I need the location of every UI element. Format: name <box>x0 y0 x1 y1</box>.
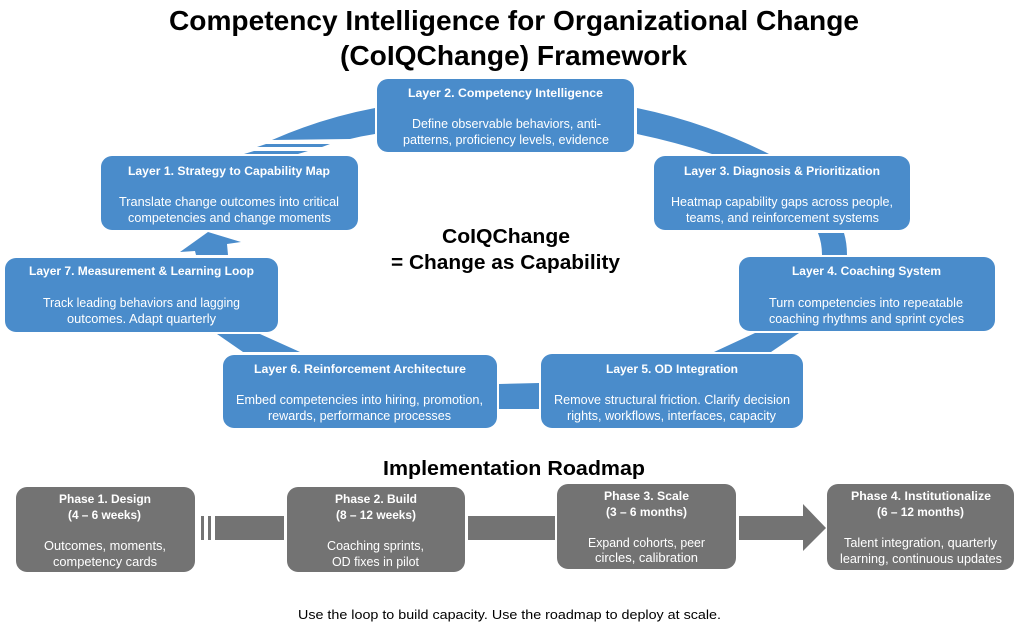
phase 4 text <box>840 491 1002 566</box>
layer 3 text: Heatmap capability gaps across people, <box>671 195 893 209</box>
phase 4 box <box>827 484 1014 570</box>
phase 2 text <box>327 494 424 569</box>
layer 6 text: Embed competencies into hiring, promotion, <box>236 393 483 407</box>
arrow: layer 3 to layer 4 <box>818 233 847 255</box>
layer 3 text: Layer 3. Diagnosis & Prioritization <box>684 166 880 178</box>
phase 2 text: Phase 2. Build <box>335 494 417 506</box>
phase 4 text: Phase 4. Institutionalize <box>851 491 991 503</box>
layer 7 text: Layer 7. Measurement & Learning Loop <box>29 266 254 278</box>
layer 2 box <box>377 79 634 152</box>
arrow: layer 2 to layer 3 <box>637 108 769 154</box>
panel: layer 3 <box>654 156 910 230</box>
panel: phase 2 <box>287 487 465 572</box>
phase 3 text <box>588 491 705 565</box>
arrow: layer 5 to layer 6 <box>499 383 539 409</box>
layer 3 text <box>671 166 893 225</box>
layer 5 box <box>541 354 803 428</box>
layer 7 text: outcomes. Adapt quarterly <box>67 312 217 326</box>
center label: = Change as Capability <box>391 252 621 274</box>
arrow: phase 1 to phase 2 <box>201 516 284 540</box>
layer 2 text: Define observable behaviors, anti- <box>412 117 601 131</box>
phase 2 box <box>287 487 465 572</box>
layer 5 text: Remove structural friction. Clarify decision <box>554 393 790 407</box>
phase 3 text: Phase 3. Scale <box>604 491 689 503</box>
arrow: phase 2 to phase 3 <box>468 516 555 540</box>
layer 2 text <box>403 88 609 147</box>
layer 4 text <box>769 266 964 326</box>
layer 7 box <box>5 258 278 332</box>
panel: layer 1 <box>101 156 358 230</box>
panel: layer 5 <box>541 354 803 428</box>
layer 7 text <box>29 266 254 326</box>
phase 1 box <box>16 487 195 572</box>
phase 1 text <box>44 494 166 569</box>
layer 2 text: patterns, proficiency levels, evidence <box>403 133 609 147</box>
center label: CoIQChange <box>442 226 570 248</box>
layer 6 text: rewards, performance processes <box>268 409 451 423</box>
phase 4 text: learning, continuous updates <box>840 552 1002 566</box>
phase 4 text: Talent integration, quarterly <box>844 536 998 550</box>
phase 3 text: Expand cohorts, peer <box>588 536 705 550</box>
footer note: Use the loop to build capacity. Use the roadmap to deploy at scale. <box>298 607 721 622</box>
layer 1 text: Translate change outcomes into critical <box>119 195 339 209</box>
layer 6 text <box>236 364 483 423</box>
arrow: layer 1 to layer 2 <box>244 108 375 154</box>
panel: phase 4 <box>827 484 1014 570</box>
layer 4 text: Layer 4. Coaching System <box>792 266 941 278</box>
title: (CoIQChange) Framework <box>340 40 687 71</box>
center label <box>391 226 621 274</box>
phase 1 text: (4 – 6 weeks) <box>68 510 141 522</box>
layer 4 text: Turn competencies into repeatable <box>769 296 963 310</box>
panel: layer 2 <box>377 79 634 152</box>
heading: implementation roadmap: Implementation Roadmap <box>383 458 645 480</box>
phase 2 text: Coaching sprints, <box>327 539 424 553</box>
layer 1 text <box>119 166 339 225</box>
phase 2 text: (8 – 12 weeks) <box>336 510 416 522</box>
panel: phase 1 <box>16 487 195 572</box>
panel: phase 3 <box>557 484 736 569</box>
layer 3 text: teams, and reinforcement systems <box>686 211 879 225</box>
phase 3 box <box>557 484 736 569</box>
arrow: layer 7 to layer 1 <box>180 232 241 255</box>
layer 4 text: coaching rhythms and sprint cycles <box>769 312 964 326</box>
arrow: layer 6 to layer 7 <box>217 334 300 352</box>
layer 2 text: Layer 2. Competency Intelligence <box>408 88 603 100</box>
phase 1 text: Phase 1. Design <box>59 494 151 506</box>
layer 1 box <box>101 156 358 230</box>
layer 5 text: Layer 5. OD Integration <box>606 364 738 376</box>
title <box>169 5 859 71</box>
phase 3 text: circles, calibration <box>595 551 698 565</box>
layer 4 box <box>739 257 995 331</box>
arrow: phase 3 to phase 4 <box>739 504 826 551</box>
layer 7 text: Track leading behaviors and lagging <box>43 296 240 310</box>
phase 4 text: (6 – 12 months) <box>877 507 964 519</box>
panel: layer 4 <box>739 257 995 331</box>
panel: layer 7 <box>5 258 278 332</box>
phase 2 text: OD fixes in pilot <box>332 555 420 569</box>
layer 5 text: rights, workflows, interfaces, capacity <box>567 409 777 423</box>
layer 5 text <box>554 364 790 423</box>
phase 1 text: Outcomes, moments, <box>44 539 166 553</box>
layer 3 box <box>654 156 910 230</box>
title: Competency Intelligence for Organizational Change <box>169 5 859 36</box>
layer 1 text: competencies and change moments <box>128 211 331 225</box>
layer 6 box <box>223 355 497 428</box>
layer 1 text: Layer 1. Strategy to Capability Map <box>128 166 330 178</box>
layer 6 text: Layer 6. Reinforcement Architecture <box>254 364 466 376</box>
phase 3 text: (3 – 6 months) <box>606 507 687 519</box>
panel: layer 6 <box>223 355 497 428</box>
phase 1 text: competency cards <box>53 555 157 569</box>
arrow: layer 4 to layer 5 <box>714 333 799 352</box>
